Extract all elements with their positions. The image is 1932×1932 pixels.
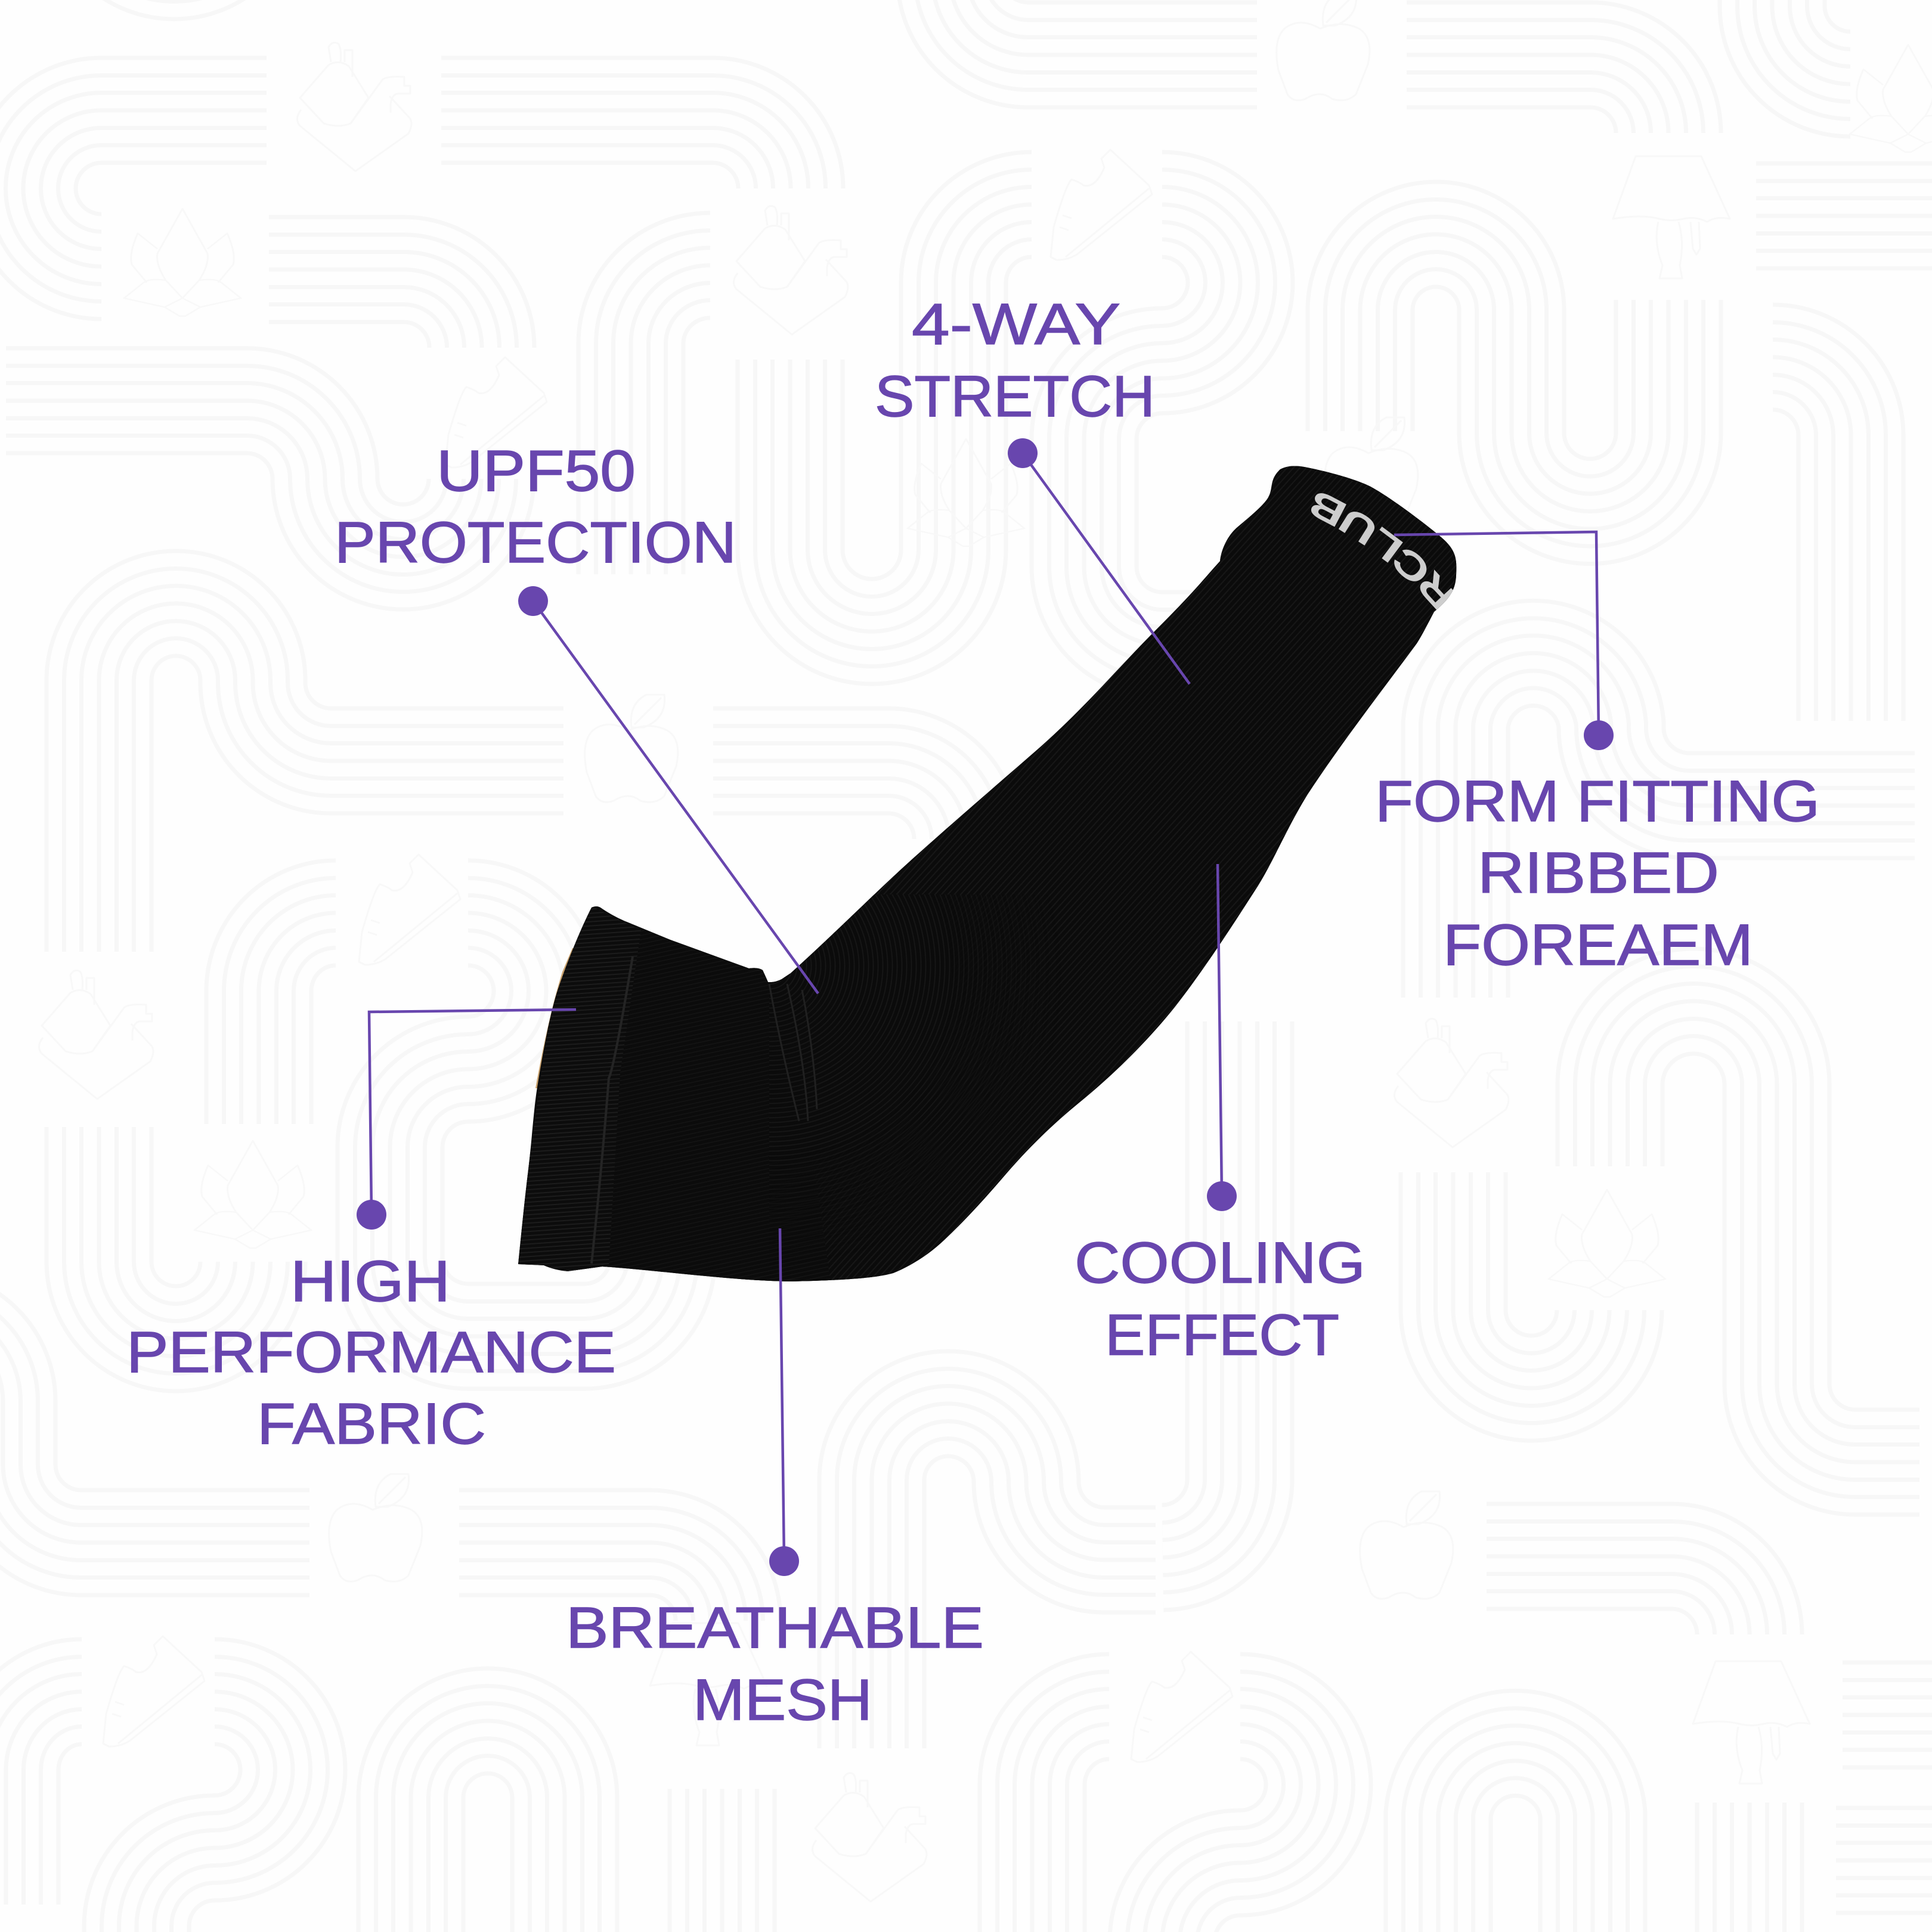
callout: UPF50 protection: PROTECTION (335, 510, 736, 575)
callout: 4-way stretch: 4-WAY (912, 292, 1120, 357)
brand text on cuff: RCLUB (1311, 493, 1453, 609)
callout: form fitting ribbed forearm: RIBBED (1478, 840, 1719, 905)
callout: breathable mesh (566, 1228, 984, 1732)
callout: form fitting ribbed forearm (1375, 532, 1820, 977)
callout: UPF50 protection: UPF50 (436, 438, 636, 503)
callout: high performance fabric: HIGH (290, 1249, 450, 1314)
callout: breathable mesh: BREATHABLE (566, 1595, 984, 1660)
callout: cooling effect: EFFECT (1105, 1302, 1339, 1367)
callout: UPF50 protection (335, 438, 818, 993)
callout: form fitting ribbed forearm: FOREAEM (1443, 912, 1753, 977)
callout: high performance fabric: FABRIC (257, 1391, 486, 1456)
callout: cooling effect: COOLING (1075, 1230, 1366, 1295)
callout: high performance fabric: PERFORMANCE (126, 1320, 616, 1385)
callout: cooling effect (1075, 864, 1366, 1367)
callout: 4-way stretch: STRETCH (875, 364, 1155, 429)
arm sleeve (518, 466, 1456, 1281)
callout: form fitting ribbed forearm: FORM FITTING (1375, 769, 1820, 834)
callout: high performance fabric (126, 1010, 616, 1456)
callout: 4-way stretch (875, 292, 1190, 684)
callout: breathable mesh: MESH (693, 1667, 872, 1732)
